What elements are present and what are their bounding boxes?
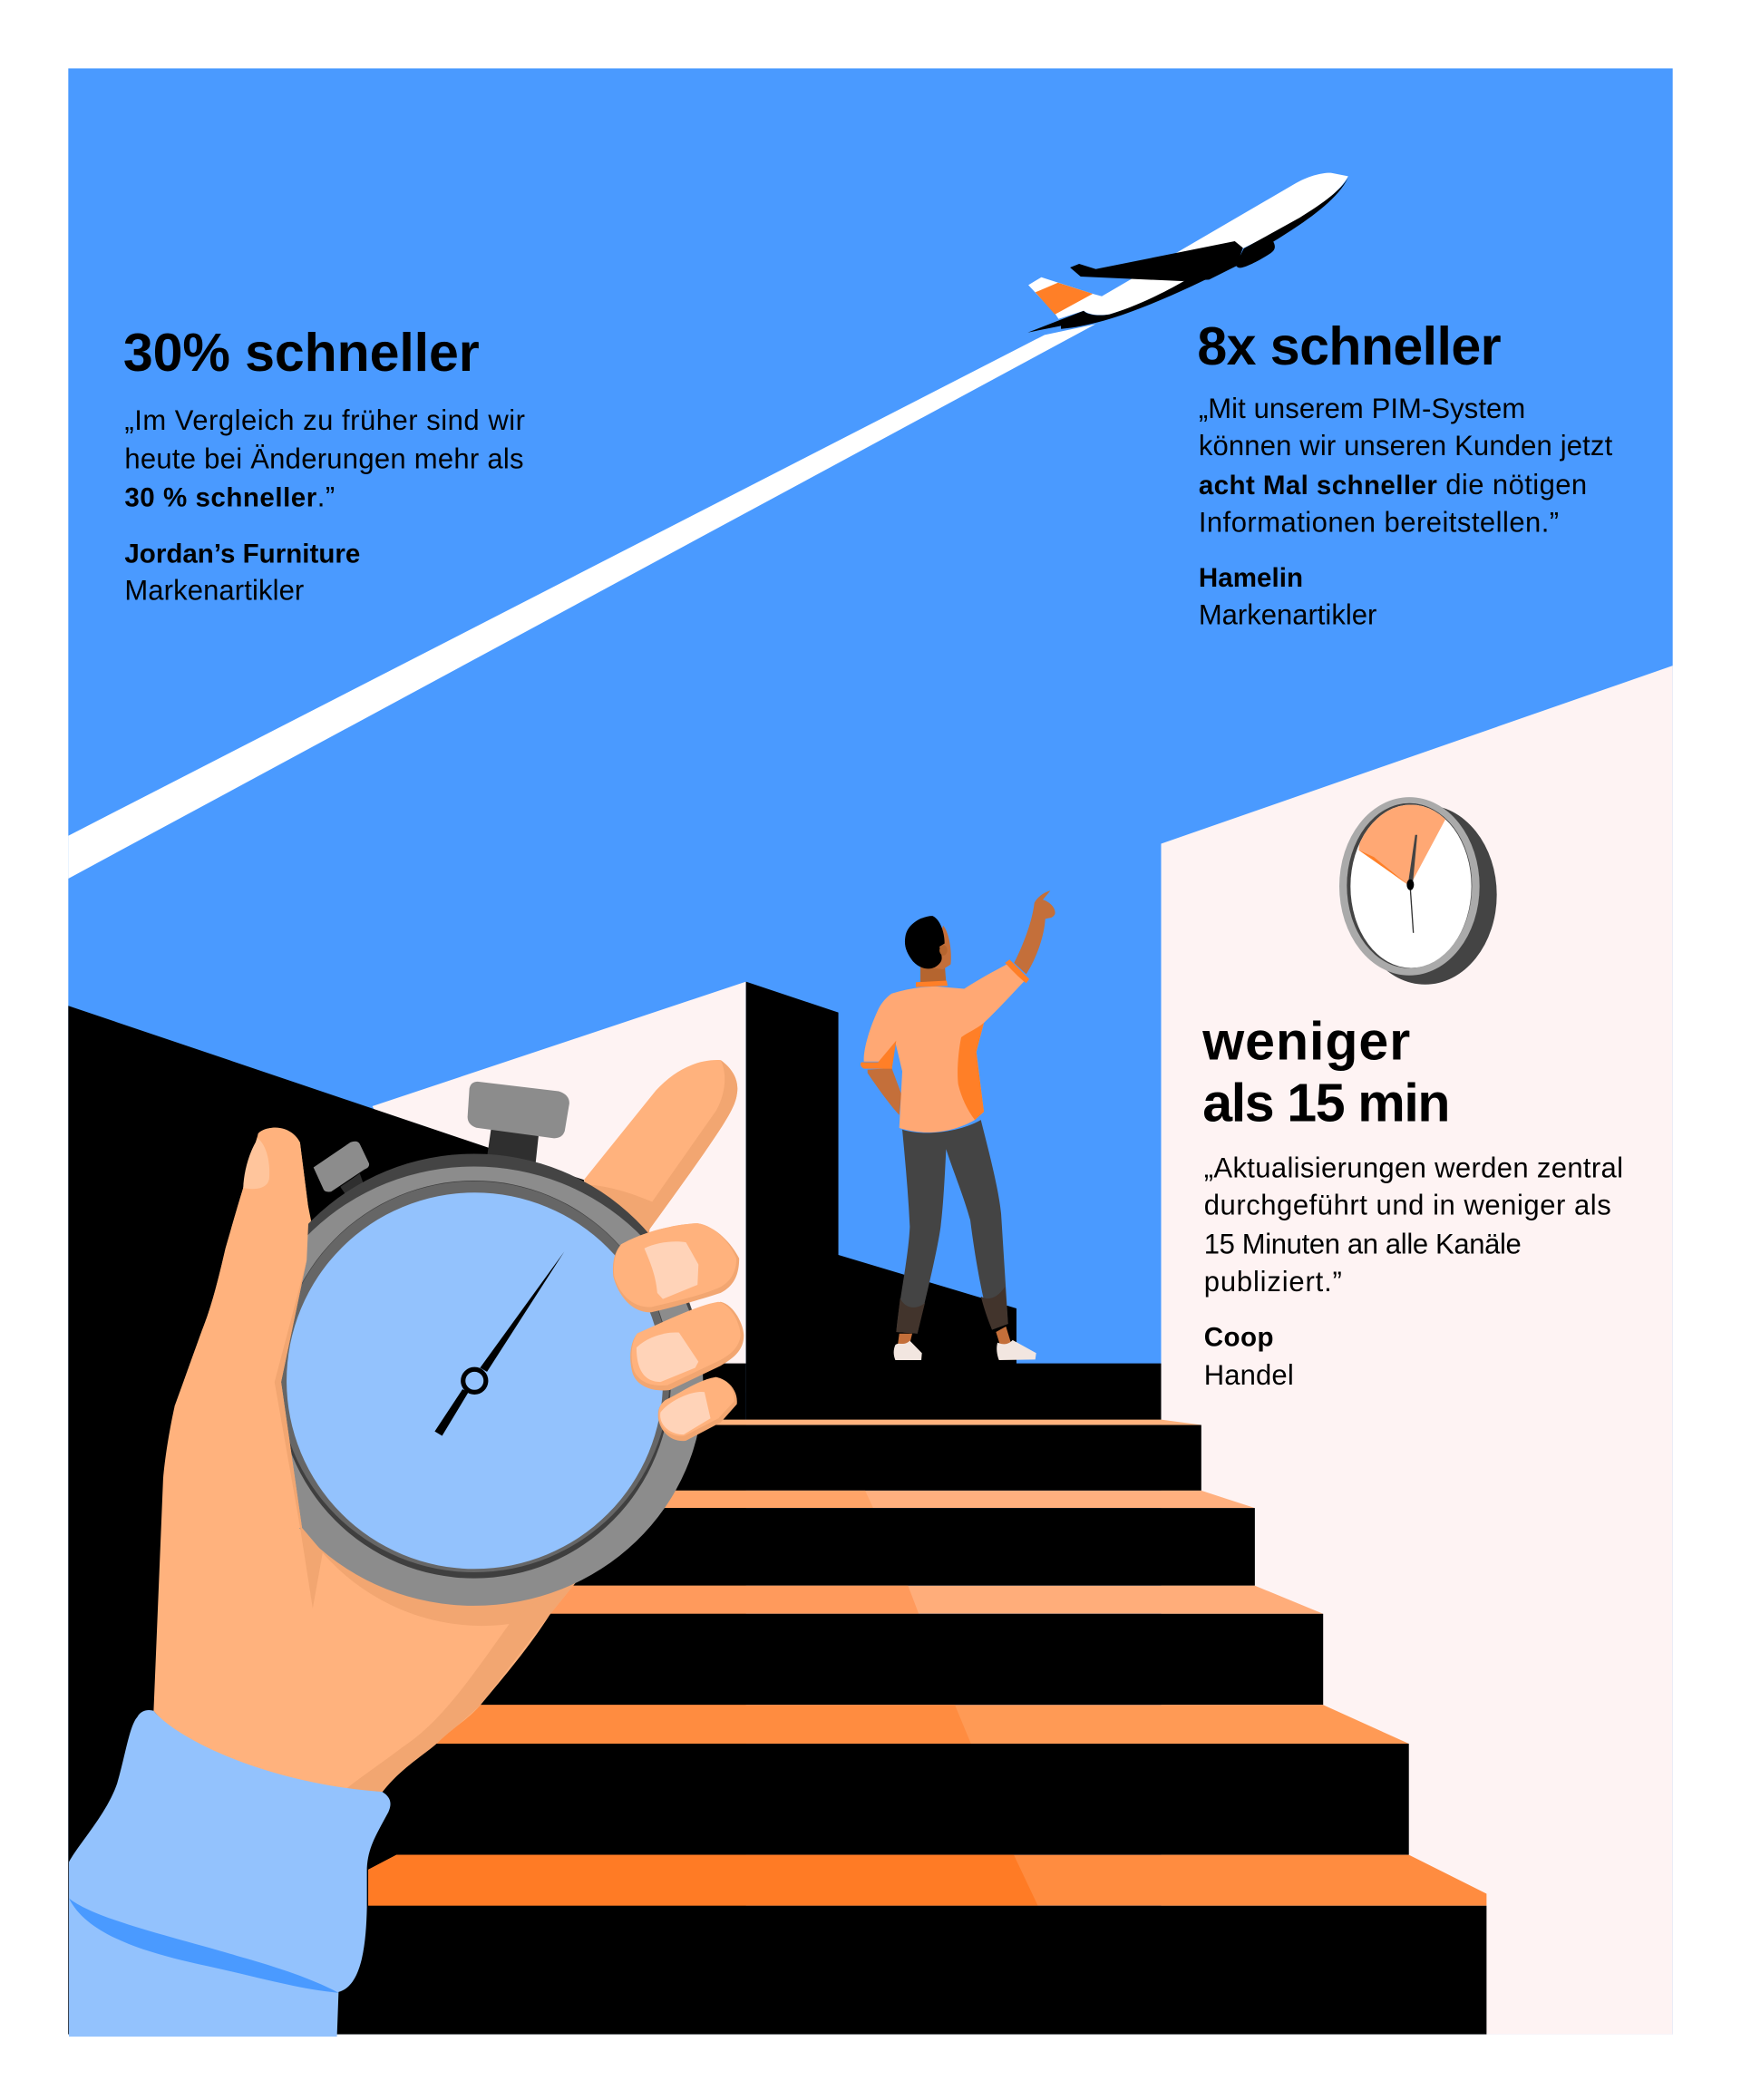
- stopwatch: outer case: [245, 1153, 703, 1605]
- heading and quote: weniger als 15 min: 15 Minuten an alle Kanäle: [1204, 1228, 1522, 1259]
- heading and quote: 8x schneller: „Mit unserem PIM-System: [1199, 393, 1525, 424]
- heading and quote: weniger als 15 min: „Aktualisierungen werden zentral: [1204, 1152, 1623, 1183]
- heading and quote: 8x schneller: Informationen bereitstellen.”: [1199, 506, 1559, 538]
- heading and quote: weniger als 15 min: publiziert.”: [1204, 1266, 1342, 1298]
- hand: three fingers on the right of the stopwatch: [613, 1223, 744, 1441]
- heading and quote: weniger als 15 min: Coop: [1204, 1322, 1274, 1352]
- hand: thumb shadow along dial: [275, 1260, 323, 1609]
- sleeve cuff: [69, 1710, 391, 2037]
- airplane contrail: [68, 325, 1095, 879]
- hand: thumb nail: [243, 1138, 269, 1189]
- heading and quote: 8x schneller: acht Mal schneller die nötigen: [1199, 469, 1587, 501]
- person: raised arm and hand: [1014, 890, 1055, 974]
- finger three: [658, 1377, 737, 1441]
- back wall: black left segment: [68, 1006, 746, 2035]
- person: neck and head: [905, 916, 951, 982]
- back wall: pink segment behind hand: [373, 982, 746, 1393]
- person: ankles: [898, 1327, 1011, 1347]
- person: lower trouser shading: [896, 1287, 1008, 1334]
- heading and quote: 8x schneller: können wir unseren Kunden jetzt: [1199, 430, 1613, 462]
- stopwatch: [245, 1082, 703, 1606]
- sleeve fold: [69, 1898, 338, 1993]
- person: collar: [916, 981, 948, 987]
- person: shirt: [864, 965, 1025, 1133]
- hand: index finger behind stopwatch: [584, 1060, 737, 1260]
- heading and quote: weniger als 15 min: durchgeführt und in weniger als: [1204, 1190, 1611, 1221]
- stopwatch: hub: [463, 1369, 486, 1392]
- heading and quote: 8x schneller: [1197, 316, 1613, 630]
- heading and quote: weniger als 15 min: Handel: [1204, 1359, 1294, 1391]
- staircase: [335, 1420, 1486, 2035]
- heading and quote: 30% schneller: heute bei Änderungen mehr als: [124, 442, 523, 474]
- heading and quote: weniger als 15 min: [1201, 1011, 1623, 1391]
- person: shoes: [894, 1340, 1036, 1360]
- hand: thumb over stopwatch: [174, 1128, 323, 1609]
- finger one: [613, 1223, 739, 1312]
- hand: palm: [153, 1128, 693, 1792]
- back wall: black column: [746, 982, 1161, 1425]
- stopwatch: crown: [468, 1082, 569, 1163]
- person: lowered arm: [868, 1068, 901, 1115]
- heading and quote: 30% schneller: 30 % schneller.”: [124, 481, 335, 512]
- hand: palm shadows: [321, 1549, 576, 1792]
- person: sleeve details: [861, 959, 1029, 1069]
- person looking up and pointing: [861, 890, 1055, 1360]
- finger two: [630, 1302, 744, 1390]
- stopwatch: needle: [434, 1251, 564, 1435]
- heading and quote: weniger als 15 min: als 15 min: [1202, 1073, 1451, 1133]
- heading and quote: 30% schneller: [123, 323, 525, 607]
- stopwatch: inner bezel: [277, 1181, 671, 1579]
- heading and quote: 30% schneller: 30% schneller: [123, 323, 480, 383]
- icon: wall clock: [1339, 792, 1497, 985]
- heading and quote: 30% schneller: Markenartikler: [124, 575, 304, 607]
- person: shirt shadow: [958, 1023, 984, 1120]
- heading and quote: 8x schneller: Hamelin: [1199, 563, 1303, 593]
- heading and quote: 30% schneller: Jordan’s Furniture: [124, 539, 360, 569]
- person: trousers: [896, 1120, 1008, 1334]
- icon: airplane: [1027, 173, 1348, 333]
- stopwatch: side button: [314, 1142, 369, 1195]
- panel: pale pink right wall: [1161, 666, 1673, 2035]
- heading and quote: 8x schneller: Markenartikler: [1199, 598, 1376, 630]
- heading and quote: weniger als 15 min: weniger: [1201, 1011, 1410, 1071]
- heading and quote: 8x schneller: 8x schneller: [1197, 316, 1502, 376]
- heading and quote: 30% schneller: „Im Vergleich zu früher sind wir: [124, 404, 525, 436]
- stopwatch: dial: [287, 1192, 663, 1569]
